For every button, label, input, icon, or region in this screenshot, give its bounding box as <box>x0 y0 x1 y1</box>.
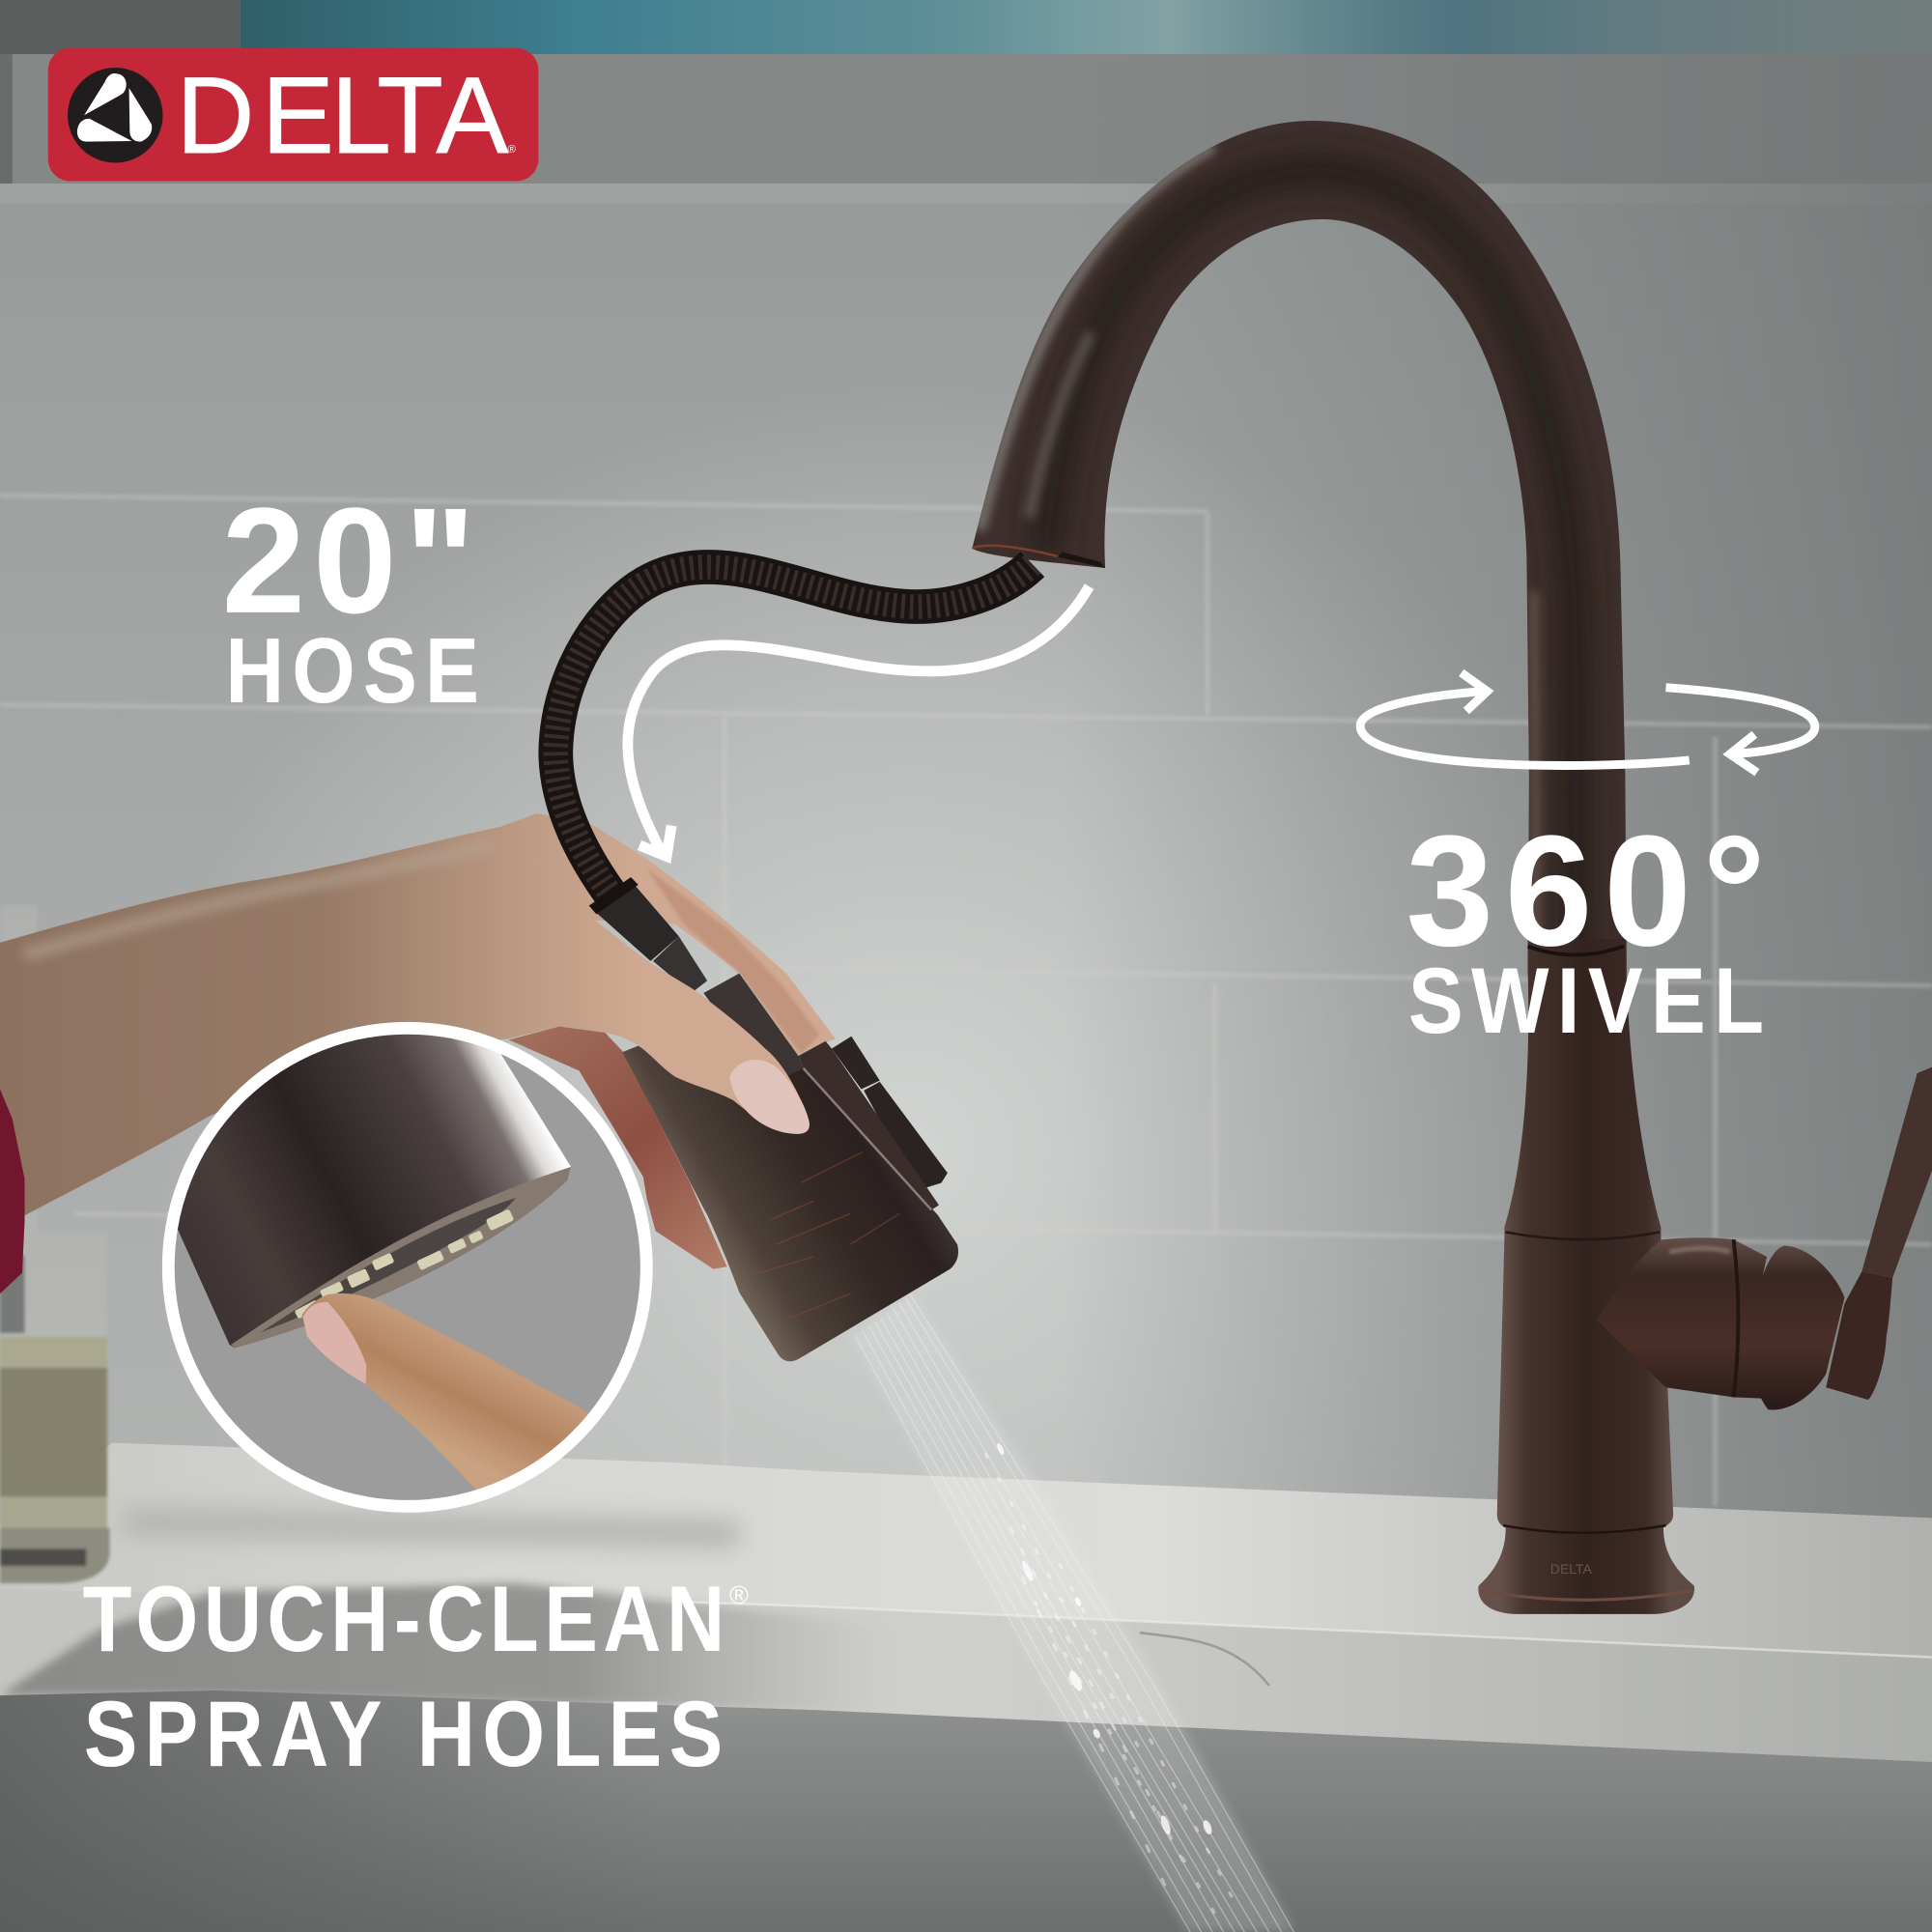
inset nozzle <box>165 1029 571 1348</box>
faucet: neck and spout <box>972 121 1627 985</box>
nozzle face with spray holes <box>231 1167 571 1348</box>
Delta logo badge <box>48 48 538 181</box>
braided hose <box>555 564 1033 894</box>
label: touch-clean spray holes <box>82 1567 749 1786</box>
forearm and hand <box>0 813 836 1230</box>
label: touch-clean spray holes: ® <box>729 1581 749 1610</box>
label: touch-clean spray holes: TOUCH-CLEAN <box>82 1567 724 1672</box>
label: 20 inch hose: 20" <box>222 476 475 644</box>
spray head selector buttons <box>799 1037 948 1210</box>
label: touch-clean spray holes: SPRAY HOLES <box>84 1682 723 1786</box>
thumb and fingernail <box>493 921 810 1134</box>
spray head copper brushing <box>752 1152 899 1319</box>
logo emblem <box>68 68 162 162</box>
label: 20 inch hose <box>222 476 479 723</box>
pull-down spray head <box>622 974 958 1361</box>
hose connector <box>589 877 707 993</box>
faucet: body, base and flange <box>1478 939 1694 1614</box>
inset finger <box>301 1293 593 1494</box>
water spray <box>851 1293 1295 1932</box>
spray head neck <box>703 974 804 1084</box>
inset circle: touch-clean spray holes <box>162 1022 653 1513</box>
logo wordmark: DELTA <box>176 54 509 176</box>
label: 360 degree swivel: 360° <box>1406 802 1766 979</box>
label: 20 inch hose: HOSE <box>225 619 479 723</box>
lower fingers behind spray head <box>509 1026 727 1269</box>
20 inch hose curved arrow <box>628 586 1090 856</box>
red sleeve <box>0 1090 25 1293</box>
label: 360 degree swivel: SWIVEL <box>1408 949 1764 1053</box>
swivel rotation arrows <box>1360 672 1815 773</box>
faucet: handle <box>1597 1067 1932 1409</box>
Delta logo badge: ® <box>508 144 517 156</box>
oil bottle <box>0 906 110 1583</box>
base engraved logo: DELTA <box>1550 1561 1592 1577</box>
inset white ring <box>168 1028 646 1506</box>
inset fingernail <box>303 1302 366 1384</box>
